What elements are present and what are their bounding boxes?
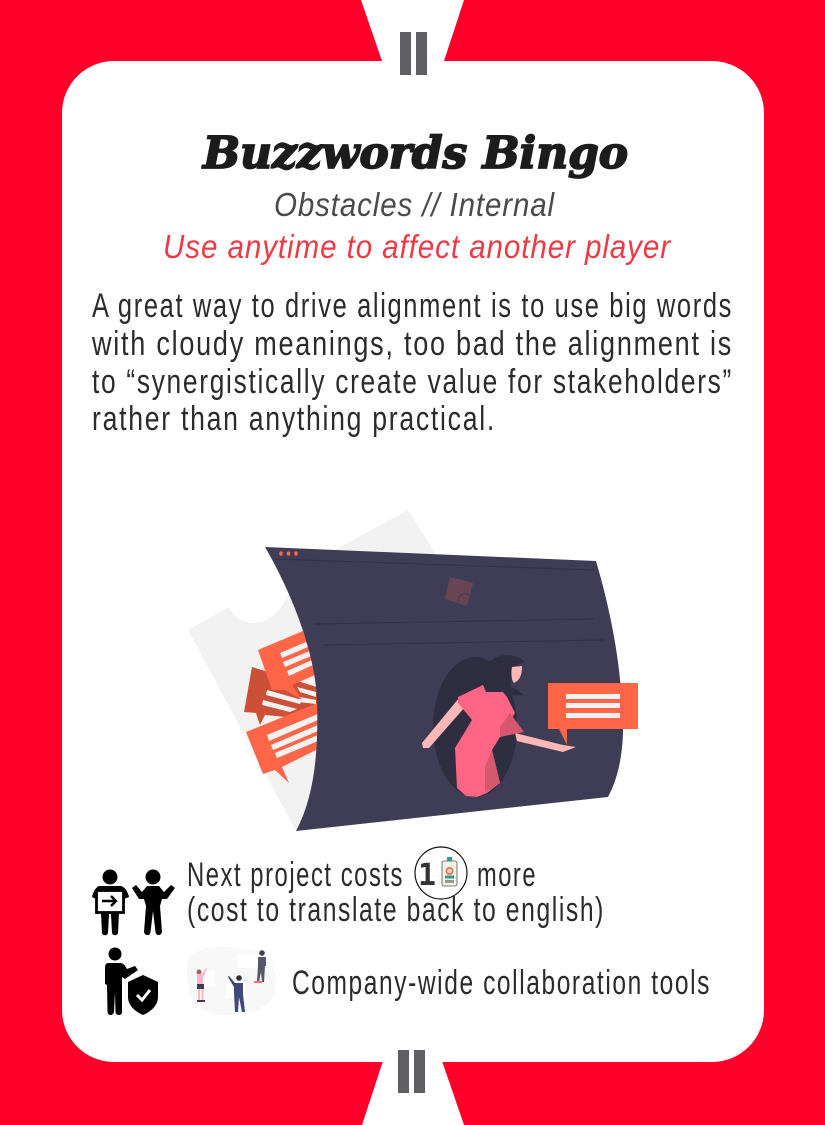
hair (482, 656, 524, 695)
dress sleeve (500, 713, 524, 737)
icon: person with shield (105, 948, 158, 1015)
subtitle: usage: Use anytime to affect another player (163, 228, 672, 265)
dark speech bubble (244, 667, 320, 725)
woman (422, 656, 576, 797)
figure: man center (228, 975, 245, 1012)
lower speech bubble (246, 702, 320, 783)
top notch (361, 0, 464, 61)
more: more (477, 856, 537, 894)
window dots (279, 551, 298, 556)
figure: man right (254, 950, 266, 983)
face (511, 666, 522, 683)
top pause marker (400, 32, 427, 75)
figure: woman (196, 968, 207, 1002)
upper speech bubble (258, 631, 322, 700)
arms (422, 698, 465, 748)
dress (455, 685, 515, 797)
description text: rather than anything practical. (92, 400, 496, 438)
title: Buzzwords Bingo (201, 128, 628, 179)
coin icon (415, 847, 467, 899)
grey ticket backdrop (188, 510, 435, 831)
description text (91, 287, 733, 438)
subtitle: category: Obstacles // Internal (274, 186, 556, 223)
faded square logo (445, 577, 473, 606)
bottom notch (362, 1061, 464, 1125)
illustration: collaboration tools (187, 947, 276, 1015)
dark browser sheet (265, 547, 623, 831)
cost reason: (cost to translate back to english) (187, 891, 605, 929)
icon: people exchanging sign (92, 870, 175, 935)
coin icon: 1 (418, 858, 436, 893)
next project cost text: Next project costs (187, 856, 404, 894)
right speech bubble (548, 683, 638, 745)
sheet lines (275, 559, 604, 645)
illustration: woman emerging from screen (188, 510, 638, 831)
bottom pause marker (398, 1050, 425, 1093)
white card panel (62, 61, 764, 1062)
hole in sheet (433, 657, 517, 797)
skirt shadow (485, 750, 500, 793)
